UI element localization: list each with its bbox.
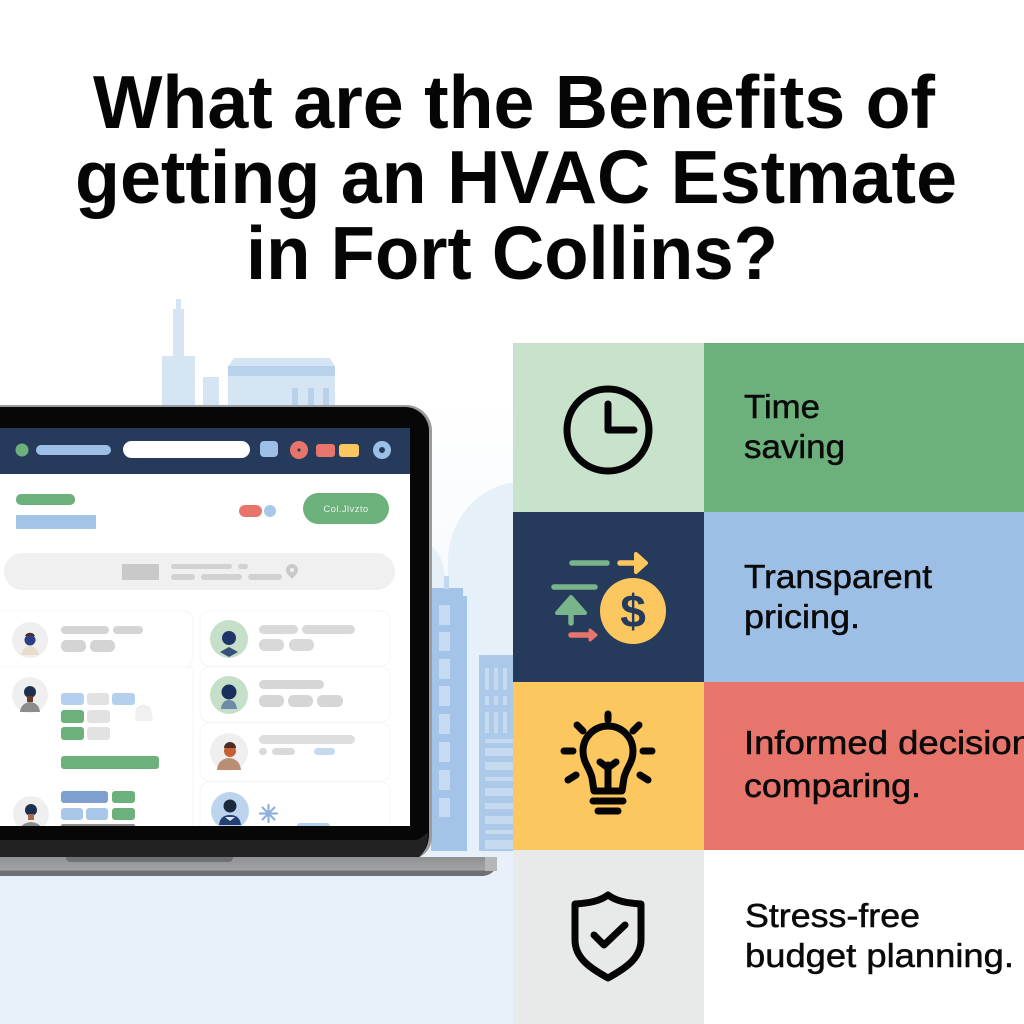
laptop <box>0 405 497 876</box>
panel: time saving <box>513 343 1024 512</box>
laptop screen <box>0 428 410 842</box>
city skyline background <box>162 299 513 851</box>
panel: stress-free budget <box>513 850 1024 1024</box>
right result cards <box>200 611 390 842</box>
left result cards <box>0 611 193 837</box>
label: time saving <box>744 388 845 465</box>
icon: star <box>260 805 277 822</box>
icon: clock <box>567 389 649 471</box>
label: stress-free budget: budget planning. <box>745 937 1014 974</box>
skyline: far buildings <box>162 299 335 408</box>
skyline: domes <box>432 482 513 752</box>
panel: informed decision <box>513 682 1024 850</box>
icon: light bulb <box>564 714 652 811</box>
tag rows lower <box>61 791 135 826</box>
label: time saving: saving <box>744 428 845 465</box>
label: informed decision: comparing. <box>744 767 921 804</box>
skyline: tower with windows <box>431 576 467 851</box>
green button <box>303 493 389 524</box>
title: in Fort Collins? <box>246 211 778 295</box>
icon: pricing arrows and coin: $ <box>620 585 646 637</box>
title: What are the Benefits of <box>93 60 936 144</box>
label: transparent pricing: Transparent <box>744 558 932 595</box>
page header <box>16 494 276 529</box>
avatar <box>12 677 48 713</box>
background wash <box>0 400 513 1024</box>
panel: transparent pricing <box>513 512 1024 682</box>
label: stress-free budget <box>745 897 1014 974</box>
avatar <box>211 792 249 826</box>
tag rows <box>61 693 159 769</box>
label: stress-free budget: Stress-free <box>745 897 920 934</box>
label: informed decision: Informed decision <box>744 724 1024 761</box>
laptop base <box>0 857 497 876</box>
avatar <box>210 733 248 771</box>
label: informed decision <box>744 724 1024 804</box>
skyline: office building <box>479 655 513 851</box>
icon: shield check <box>575 895 641 978</box>
label: time saving: Time <box>744 388 820 425</box>
avatar <box>12 622 48 658</box>
label: transparent pricing <box>744 558 932 635</box>
label: transparent pricing: pricing. <box>744 598 860 635</box>
laptop lid bezel <box>0 405 432 857</box>
icon: pricing arrows and coin <box>554 554 666 644</box>
avatar <box>210 620 248 658</box>
browser toolbar <box>0 428 410 474</box>
avatar <box>13 796 49 826</box>
search bar <box>4 553 395 590</box>
avatar <box>210 676 248 714</box>
green button: Col.Jlvzto <box>323 504 369 515</box>
title: getting an HVAC Estmate <box>75 135 957 219</box>
title <box>75 60 957 295</box>
